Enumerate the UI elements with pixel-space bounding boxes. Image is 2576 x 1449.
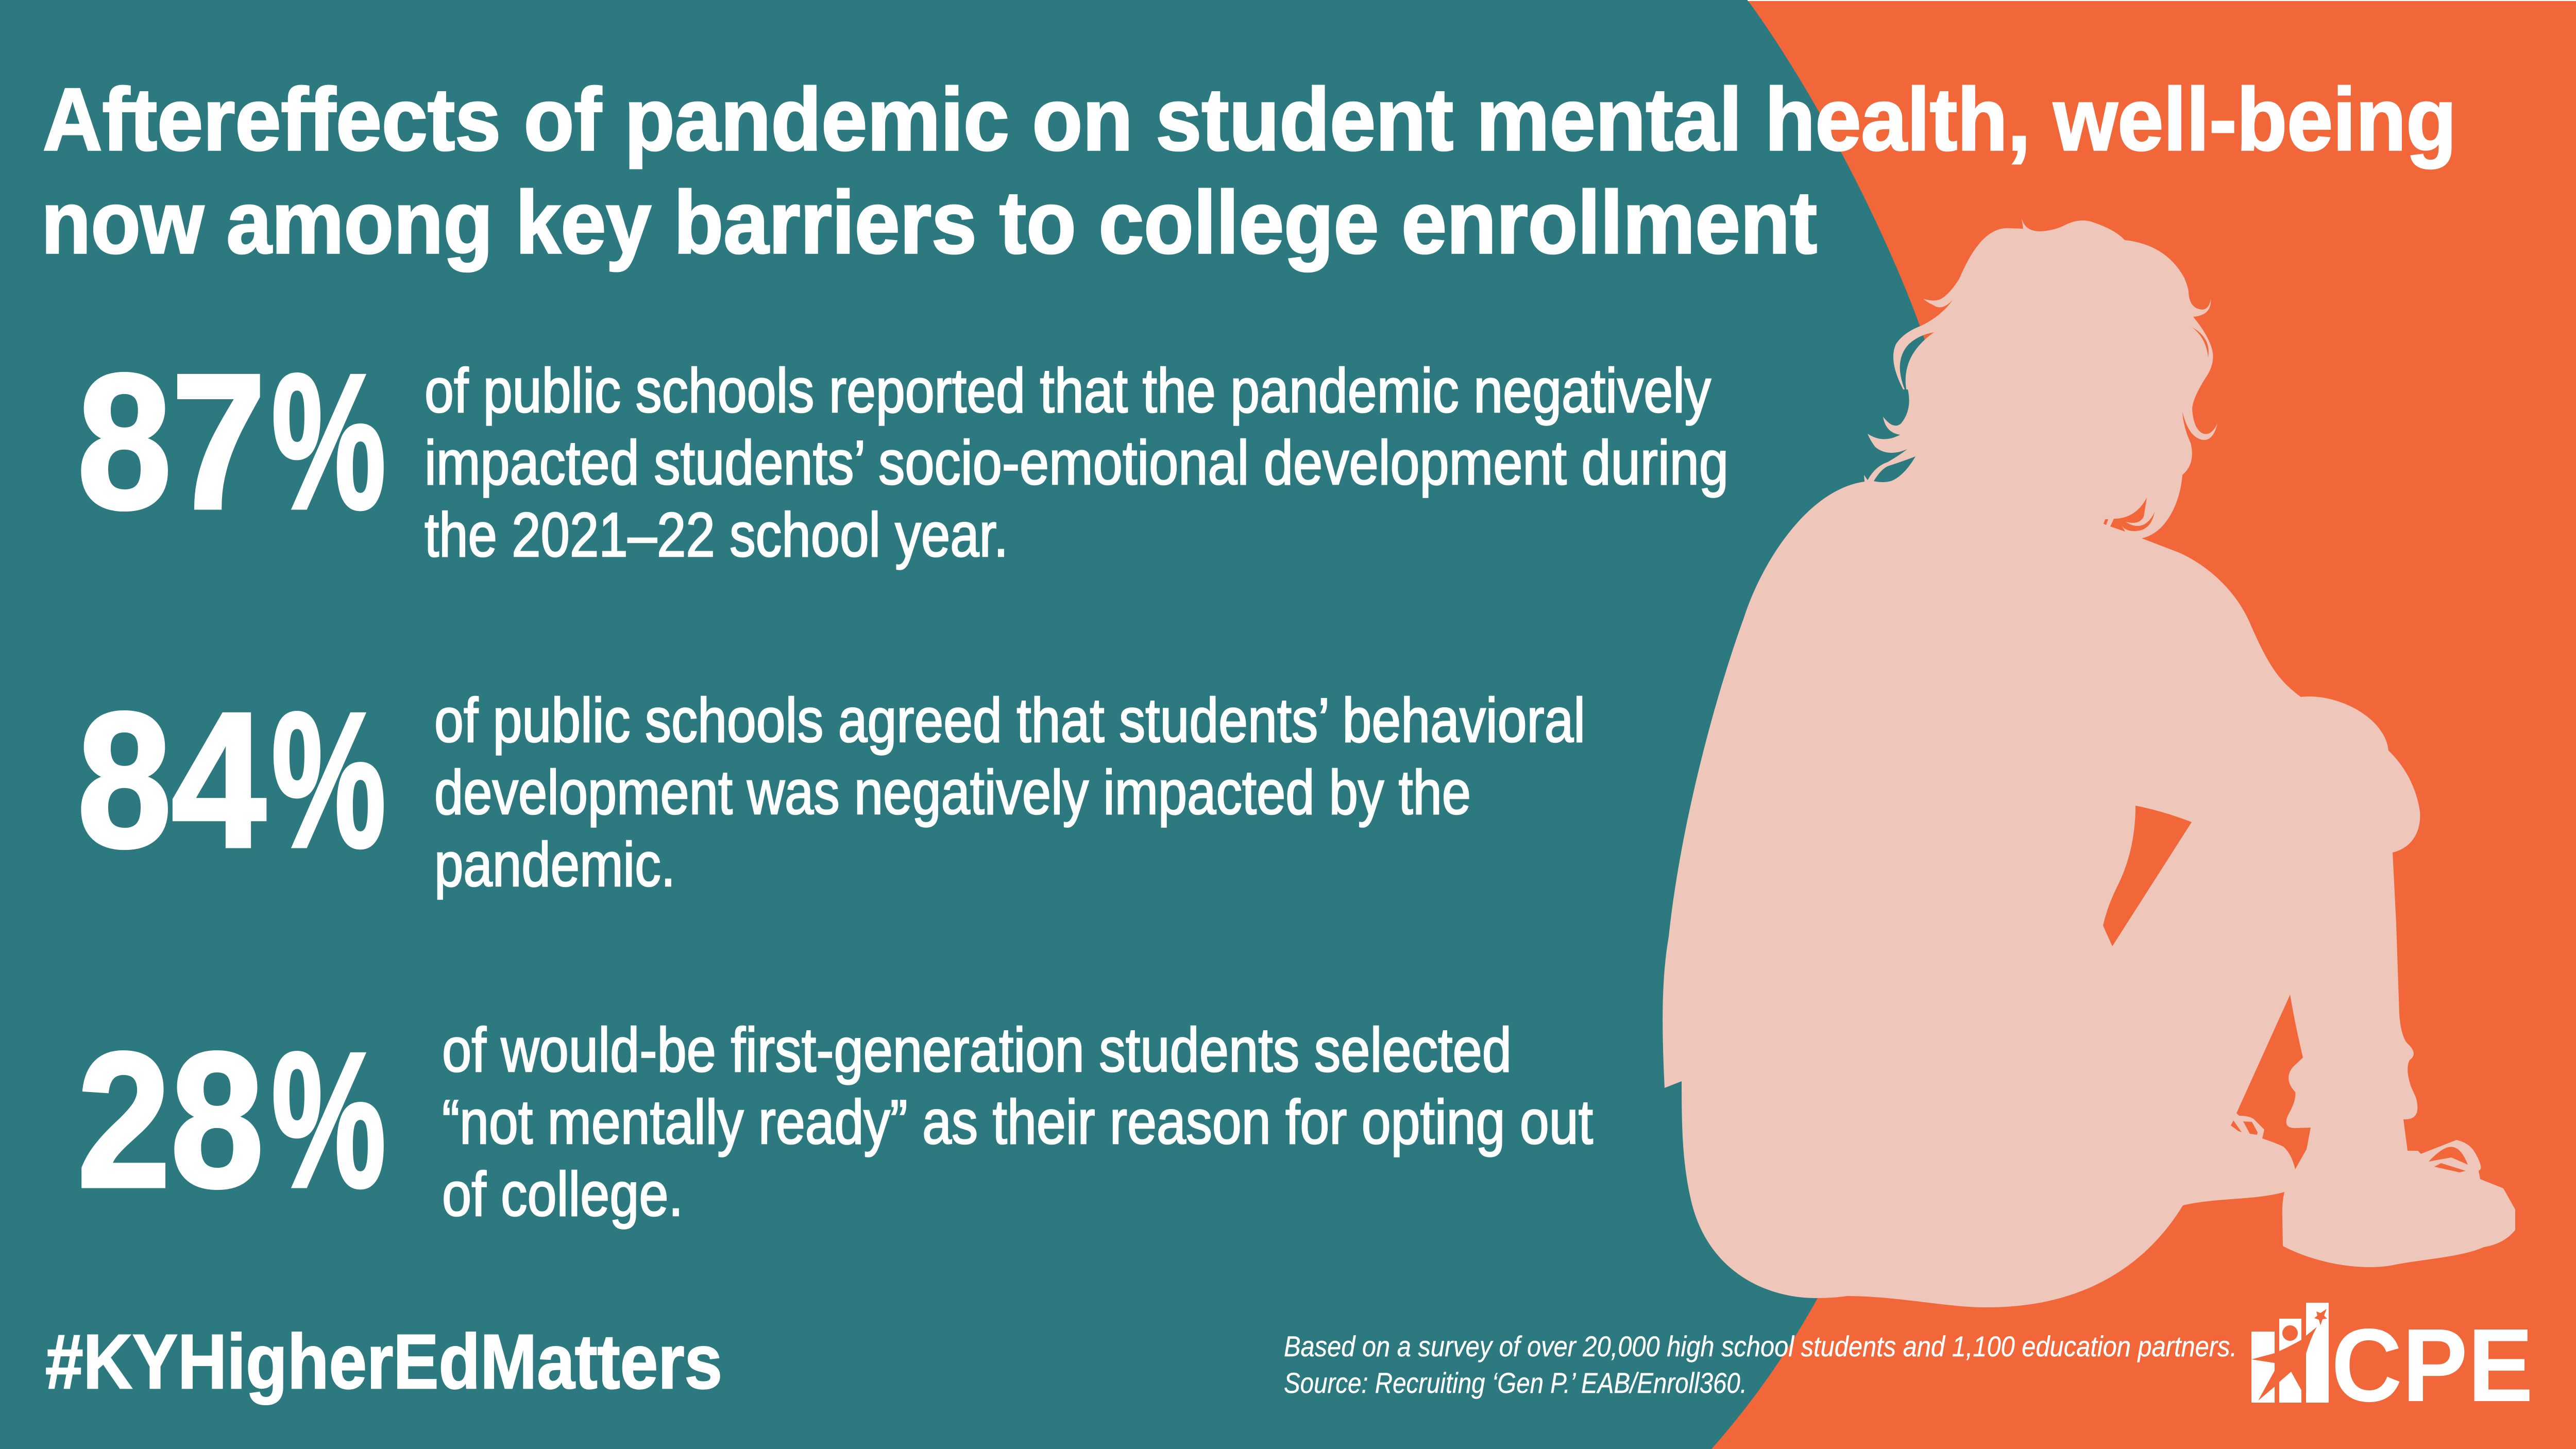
big number: 84% — [77, 673, 386, 888]
source note: Based on a survey of over 20,000 high school students and 1,100 education partners. — [1284, 1330, 2237, 1362]
source note — [1284, 1330, 2237, 1399]
big number: 84%: % — [272, 673, 386, 888]
icon: bars with star figure — [2251, 1303, 2329, 1403]
background panel: orange curved field — [1711, 0, 2576, 1449]
logo: CPE — [2251, 1303, 2533, 1423]
description text: 84%: of public schools agreed that students’ behavioral — [434, 685, 1585, 755]
big number: 87% — [77, 334, 386, 549]
big number: 84%: 84 — [77, 673, 267, 888]
description text: 28%: “not mentally ready” as their reason for opting out — [442, 1087, 1593, 1157]
stat block: 84 percent — [77, 673, 1585, 899]
big number: 28%: 28 — [77, 1013, 264, 1228]
source note: Source: Recruiting ‘Gen P.’ EAB/Enroll360. — [1284, 1367, 1747, 1399]
description text: 84%: pandemic. — [434, 829, 675, 899]
description text: 28%: of would-be first-generation students selected — [442, 1015, 1512, 1085]
title: Aftereffects of pandemic on student mental health, well-being — [43, 70, 2456, 169]
illustration: silhouette of seated student with head down — [1663, 218, 2515, 1307]
big number: 87%: 87 — [77, 334, 266, 549]
big number: 28%: % — [272, 1013, 386, 1228]
title — [41, 70, 2456, 272]
description text: 87%: the 2021–22 school year. — [425, 500, 1008, 570]
description text: 84%: development was negatively impacted by the — [434, 757, 1471, 827]
wordmark: CPE — [2331, 1307, 2533, 1423]
description text: 87%: impacted students’ socio-emotional development during — [425, 428, 1728, 498]
description text: 28%: of college. — [442, 1159, 683, 1229]
description text: 84% — [434, 685, 1585, 899]
description text: 87% — [425, 355, 1728, 570]
description text: 28% — [442, 1015, 1593, 1229]
stat block: 87 percent — [77, 334, 1728, 570]
big number: 87%: % — [272, 334, 386, 549]
hashtag: #KYHigherEdMatters — [45, 1318, 722, 1405]
title: now among key barriers to college enrollment — [41, 173, 1817, 272]
stat block: 28 percent — [77, 1013, 1593, 1229]
big number: 28% — [77, 1013, 386, 1228]
description text: 87%: of public schools reported that the pandemic negatively — [425, 355, 1711, 425]
